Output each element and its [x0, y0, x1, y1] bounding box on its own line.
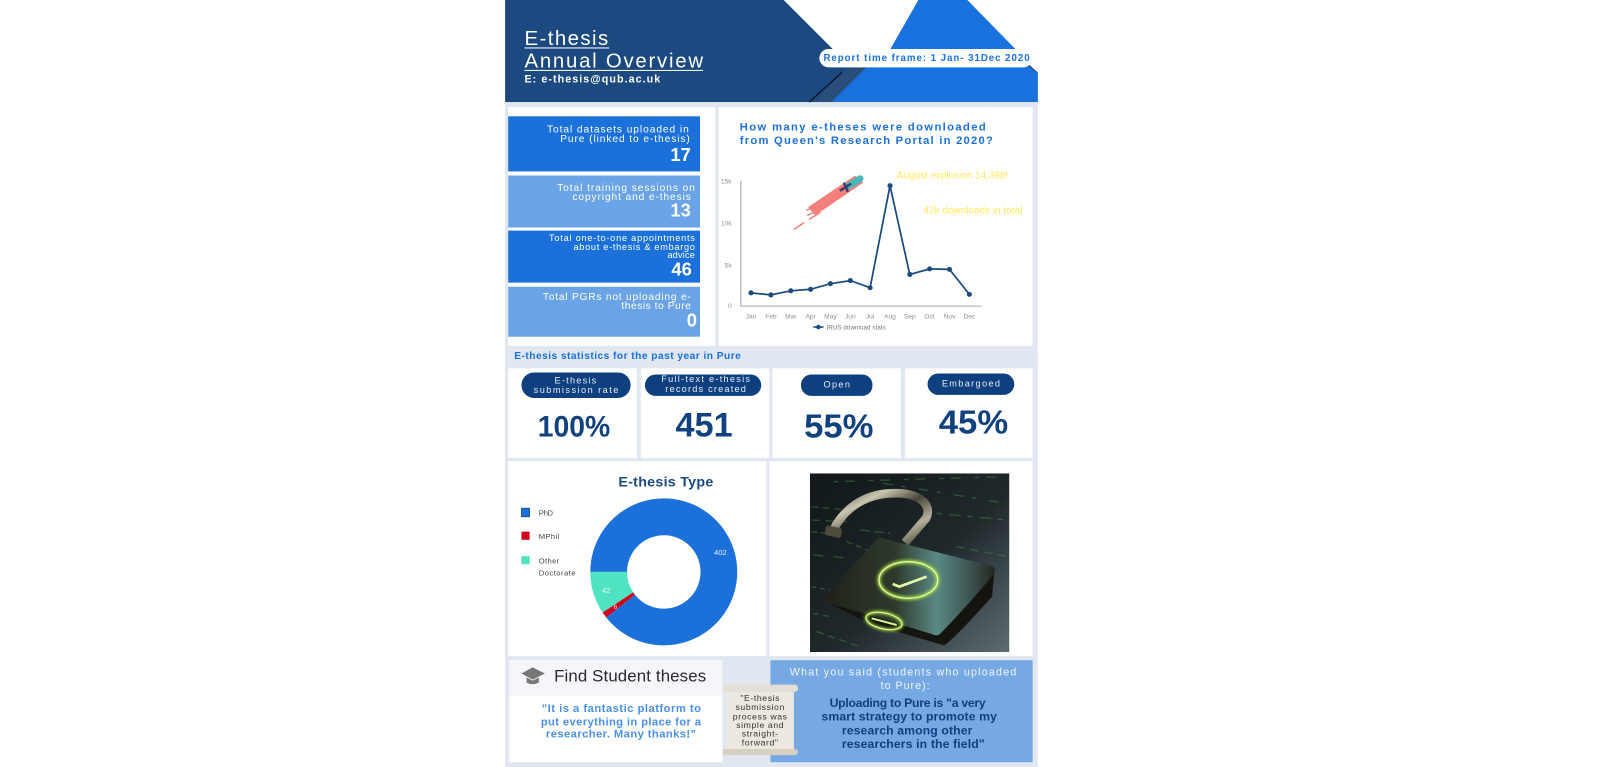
y axis labels: 15k [721, 179, 732, 186]
stat box: training sessions: 13 [670, 199, 691, 220]
x axis labels: Dec [963, 313, 976, 320]
card: open: Open [823, 380, 850, 390]
card: submission rate: 100% [538, 411, 610, 444]
page background [505, 0, 1038, 767]
callout: August peak: August explosion 14,398! [897, 171, 1008, 182]
title: Annual Overview [524, 50, 703, 72]
card: submission rate: E-thesis [555, 376, 597, 386]
report time frame pill: Report time frame: 1 Jan- 31Dec 2020 [823, 53, 1030, 64]
x axis labels: Feb [765, 313, 777, 320]
stat box: PGRs not uploading: thesis to Pure [621, 301, 691, 312]
callout: total downloads: 42k downloads in total [923, 205, 1022, 216]
scroll quote: forward" [742, 737, 779, 747]
stat box: datasets [508, 116, 700, 171]
stat box: appointments: Total one-to-one appointments [549, 233, 695, 243]
stat box: datasets: Pure (linked to e-thesis) [560, 134, 690, 145]
scroll quote: submission [735, 702, 785, 712]
card: submission rate [508, 368, 637, 458]
x axis labels: Mar [785, 313, 797, 320]
panel: find student theses [509, 660, 722, 762]
scroll quote [722, 685, 798, 755]
panel heading: to Pure): [881, 680, 930, 692]
card: records created: records created [665, 384, 746, 394]
card: open [772, 368, 901, 458]
panel: what you said [770, 660, 1033, 762]
card: embargoed: Embargoed [942, 379, 1000, 389]
donut legend: PhD [539, 508, 554, 517]
panel: e-thesis type donut [508, 461, 766, 656]
x axis labels: Nov [944, 313, 956, 320]
title [524, 28, 703, 72]
stat box: training sessions [508, 176, 700, 228]
scroll quote: simple and [736, 720, 784, 730]
donut chart: 42 [602, 586, 610, 595]
student quote: Uploading to Pure is "a very [830, 696, 986, 710]
student quote: research among other [842, 724, 973, 738]
stat box: appointments: advice [667, 250, 695, 260]
title: E-thesis [524, 28, 608, 50]
header banner [505, 0, 1039, 102]
donut chart: 6 [613, 604, 617, 611]
card: open: 55% [804, 409, 874, 446]
panel heading [790, 666, 1016, 692]
icon: graduation cap [521, 667, 545, 684]
stat box: datasets: Total datasets uploaded in [547, 125, 689, 136]
scroll quote: process was [733, 711, 788, 721]
x axis labels: Jan [746, 313, 757, 320]
student quote: "It is a fantastic platform to [542, 703, 701, 715]
data line [748, 183, 972, 297]
card: embargoed [905, 368, 1033, 458]
card: records created [641, 368, 769, 458]
card: records created: Full-text e-thesis [661, 374, 750, 384]
student quote: researchers in the field" [842, 737, 985, 751]
panel: downloads chart [718, 107, 1033, 346]
donut legend: Doctorate [539, 568, 576, 577]
scroll quote: "E-thesis [740, 693, 780, 703]
chart heading [740, 122, 993, 147]
donut chart: 402 [714, 548, 727, 557]
picture: glowing open padlock [810, 473, 1009, 652]
x axis labels [746, 313, 976, 320]
student quote [541, 703, 702, 741]
chart heading: How many e-theses were downloaded [740, 122, 986, 134]
x axis labels: Jun [845, 313, 856, 320]
stat box: training sessions: copyright and e-thesis [572, 192, 691, 203]
chart legend: IRUS download stats [827, 325, 886, 332]
y axis labels [721, 179, 732, 310]
donut chart [590, 498, 737, 645]
donut legend: Other [539, 556, 560, 565]
heading: statistics section: E-thesis statistics for the past year in Pure [514, 351, 741, 362]
card: records created: 451 [676, 407, 733, 445]
card: submission rate: submission rate [534, 385, 618, 395]
student quote: put everything in place for a [541, 716, 702, 728]
icon: comet [794, 176, 863, 230]
report time frame pill [819, 49, 1033, 67]
donut legend [521, 508, 576, 577]
x axis labels: Jul [866, 313, 875, 320]
student quote [821, 696, 997, 751]
panel heading: Find Student theses [554, 667, 706, 686]
y axis labels: 0 [728, 303, 732, 310]
card: embargoed: 45% [939, 405, 1008, 442]
panel heading: What you said (students who uploaded [790, 666, 1016, 678]
stat box: appointments: 46 [671, 259, 692, 280]
x axis labels: Oct [924, 313, 935, 320]
stat box: PGRs not uploading: Total PGRs not uploading e- [543, 292, 691, 303]
donut legend: MPhil [539, 532, 559, 541]
stat box: appointments: about e-thesis & embargo [573, 242, 695, 252]
x axis labels: May [824, 313, 837, 320]
stat box: training sessions: Total training sessions on [557, 183, 695, 194]
y axis labels: 10k [721, 221, 732, 228]
donut heading: E-thesis Type [618, 475, 713, 491]
stat box: PGRs not uploading [508, 287, 700, 337]
x axis labels: Sep [904, 313, 916, 320]
chart heading: from Queen's Research Portal in 2020? [740, 135, 993, 147]
stat box: appointments [508, 231, 700, 283]
stat box: datasets: 17 [670, 144, 691, 165]
y axis labels: 5k [725, 262, 732, 269]
scroll quote: straight- [742, 729, 779, 739]
student quote: smart strategy to promote my [821, 709, 997, 723]
panel: open padlock image [769, 461, 1033, 656]
panel: key totals [508, 107, 715, 346]
student quote: researcher. Many thanks!" [546, 729, 696, 741]
line chart: IRUS downloads by month [721, 179, 982, 332]
stat box: PGRs not uploading: 0 [687, 310, 697, 331]
contact email: E: e-thesis@qub.ac.uk [524, 74, 660, 86]
x axis labels: Aug [884, 313, 896, 320]
x axis labels: Apr [805, 313, 817, 320]
